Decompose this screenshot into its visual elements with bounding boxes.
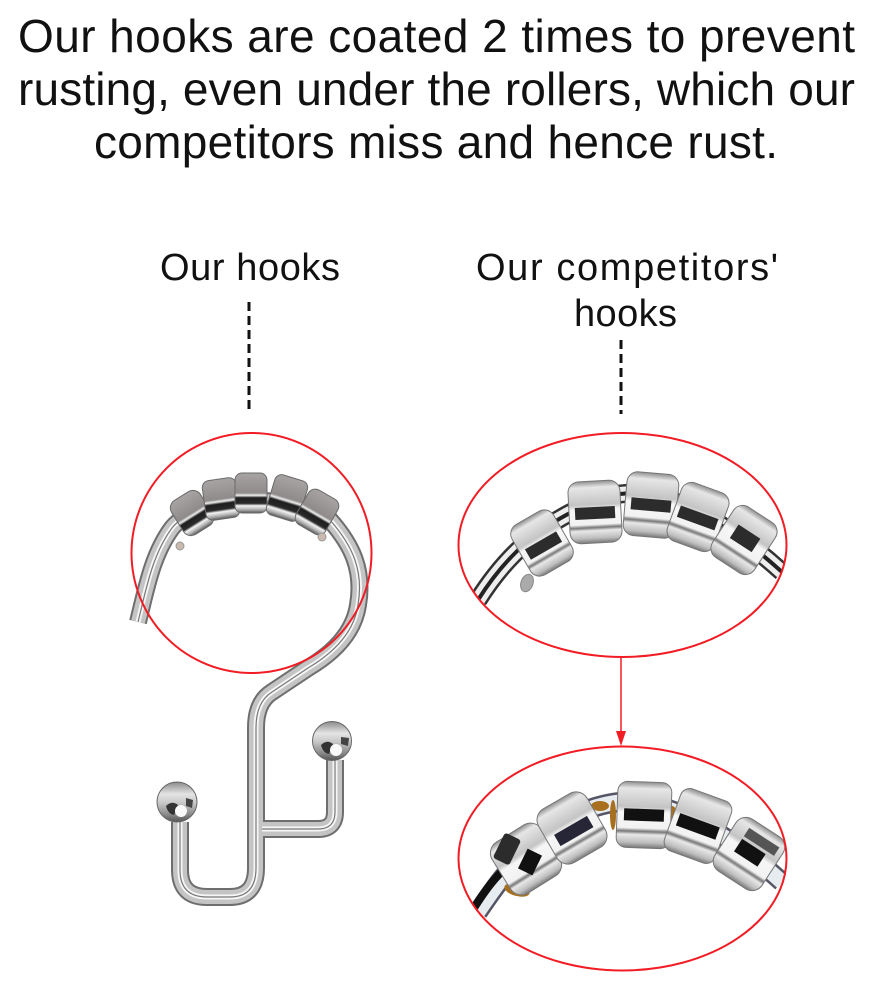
label: our competitors' hooks: Our competitors' (476, 247, 778, 289)
ball end: left (157, 782, 197, 822)
red circle: our rollers (132, 433, 372, 673)
rivet (520, 574, 534, 592)
label: our competitors' hooks (476, 247, 778, 335)
title: rusting, even under the rollers, which our (18, 63, 855, 115)
title: competitors miss and hence rust. (94, 116, 778, 168)
wire (474, 802, 782, 912)
ball end: right (312, 722, 352, 760)
competitor hook, rusted (474, 781, 789, 912)
rollers (486, 781, 789, 900)
title: Our hooks are coated 2 times to prevent (18, 10, 855, 62)
rust stains (504, 800, 676, 897)
rollers (507, 471, 781, 580)
red ellipse: competitors' rusted rollers (458, 746, 786, 970)
rivets (176, 533, 326, 550)
hook wire (138, 501, 360, 897)
dashed leader: our hooks (248, 302, 250, 414)
red ellipse: competitors' new rollers (458, 433, 786, 657)
dashed leader: competitors' hooks (620, 340, 622, 414)
our hook illustration (138, 473, 360, 897)
label: our competitors' hooks: hooks (574, 293, 677, 335)
red arrow (616, 657, 626, 746)
wire (478, 493, 782, 600)
rollers (167, 473, 342, 539)
title (18, 10, 855, 168)
label: our hooks: Our hooks (160, 247, 340, 289)
competitor hook, new (478, 471, 782, 600)
